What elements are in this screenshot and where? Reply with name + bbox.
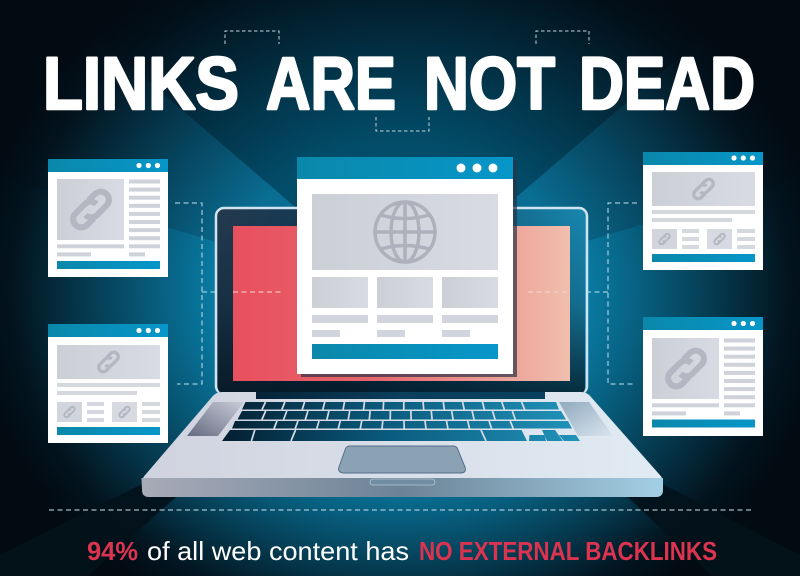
connector: left dashed bracket xyxy=(175,203,283,384)
footer statistic: of all web content has xyxy=(147,536,409,566)
title bar xyxy=(48,324,168,337)
icon: chain link xyxy=(692,177,715,201)
hero image xyxy=(57,345,160,379)
trackpad xyxy=(339,446,465,473)
title: LINKS xyxy=(43,42,239,125)
small images xyxy=(652,229,732,249)
icon: chain link xyxy=(97,350,120,374)
decorative bracket: below title xyxy=(376,117,429,131)
title bar xyxy=(297,157,513,179)
button bar xyxy=(312,344,498,359)
footer statistic: 94% xyxy=(87,536,138,566)
text lines xyxy=(312,315,498,337)
browser window: top right link page xyxy=(643,152,763,270)
dashed divider xyxy=(49,509,752,511)
hero image xyxy=(57,179,124,240)
text lines xyxy=(652,338,755,415)
laptop screen lid xyxy=(216,208,587,394)
browser window: bottom right link page xyxy=(643,317,763,436)
title bar xyxy=(48,159,168,172)
window shadow xyxy=(301,160,517,377)
front notch xyxy=(370,479,435,485)
text lines xyxy=(652,210,755,249)
footer statistic xyxy=(87,536,717,566)
small images xyxy=(57,402,137,422)
title bar xyxy=(643,317,763,330)
title: ARE xyxy=(266,42,396,125)
text lines xyxy=(57,383,160,422)
decorative bracket: top left xyxy=(225,31,279,44)
hero image xyxy=(312,194,498,270)
laptop xyxy=(142,208,663,497)
footer statistic: NO EXTERNAL BACKLINKS xyxy=(419,536,717,566)
thumbnails xyxy=(312,277,498,308)
button bar xyxy=(57,427,160,435)
window body xyxy=(297,157,513,374)
title bar xyxy=(643,152,763,165)
laptop base xyxy=(142,392,663,497)
left speaker xyxy=(187,402,244,436)
title: NOT xyxy=(424,42,555,125)
browser window: top left link page xyxy=(48,159,168,277)
button bar xyxy=(652,420,755,428)
browser window: bottom left link page xyxy=(48,324,168,443)
button bar xyxy=(57,261,160,269)
keyboard xyxy=(222,402,580,441)
hero image xyxy=(652,338,719,399)
title: DEAD xyxy=(579,42,755,125)
browser window: centre globe page xyxy=(297,157,517,377)
decorative bracket: top right xyxy=(536,31,589,44)
text lines xyxy=(57,180,160,256)
connector: right dashed bracket xyxy=(528,203,637,384)
icon: chain link xyxy=(665,347,707,390)
icon: chain link xyxy=(70,188,112,231)
button bar xyxy=(652,254,755,262)
hero image xyxy=(652,172,755,206)
title xyxy=(43,42,755,125)
icon: globe xyxy=(375,202,435,262)
right speaker xyxy=(559,402,613,436)
